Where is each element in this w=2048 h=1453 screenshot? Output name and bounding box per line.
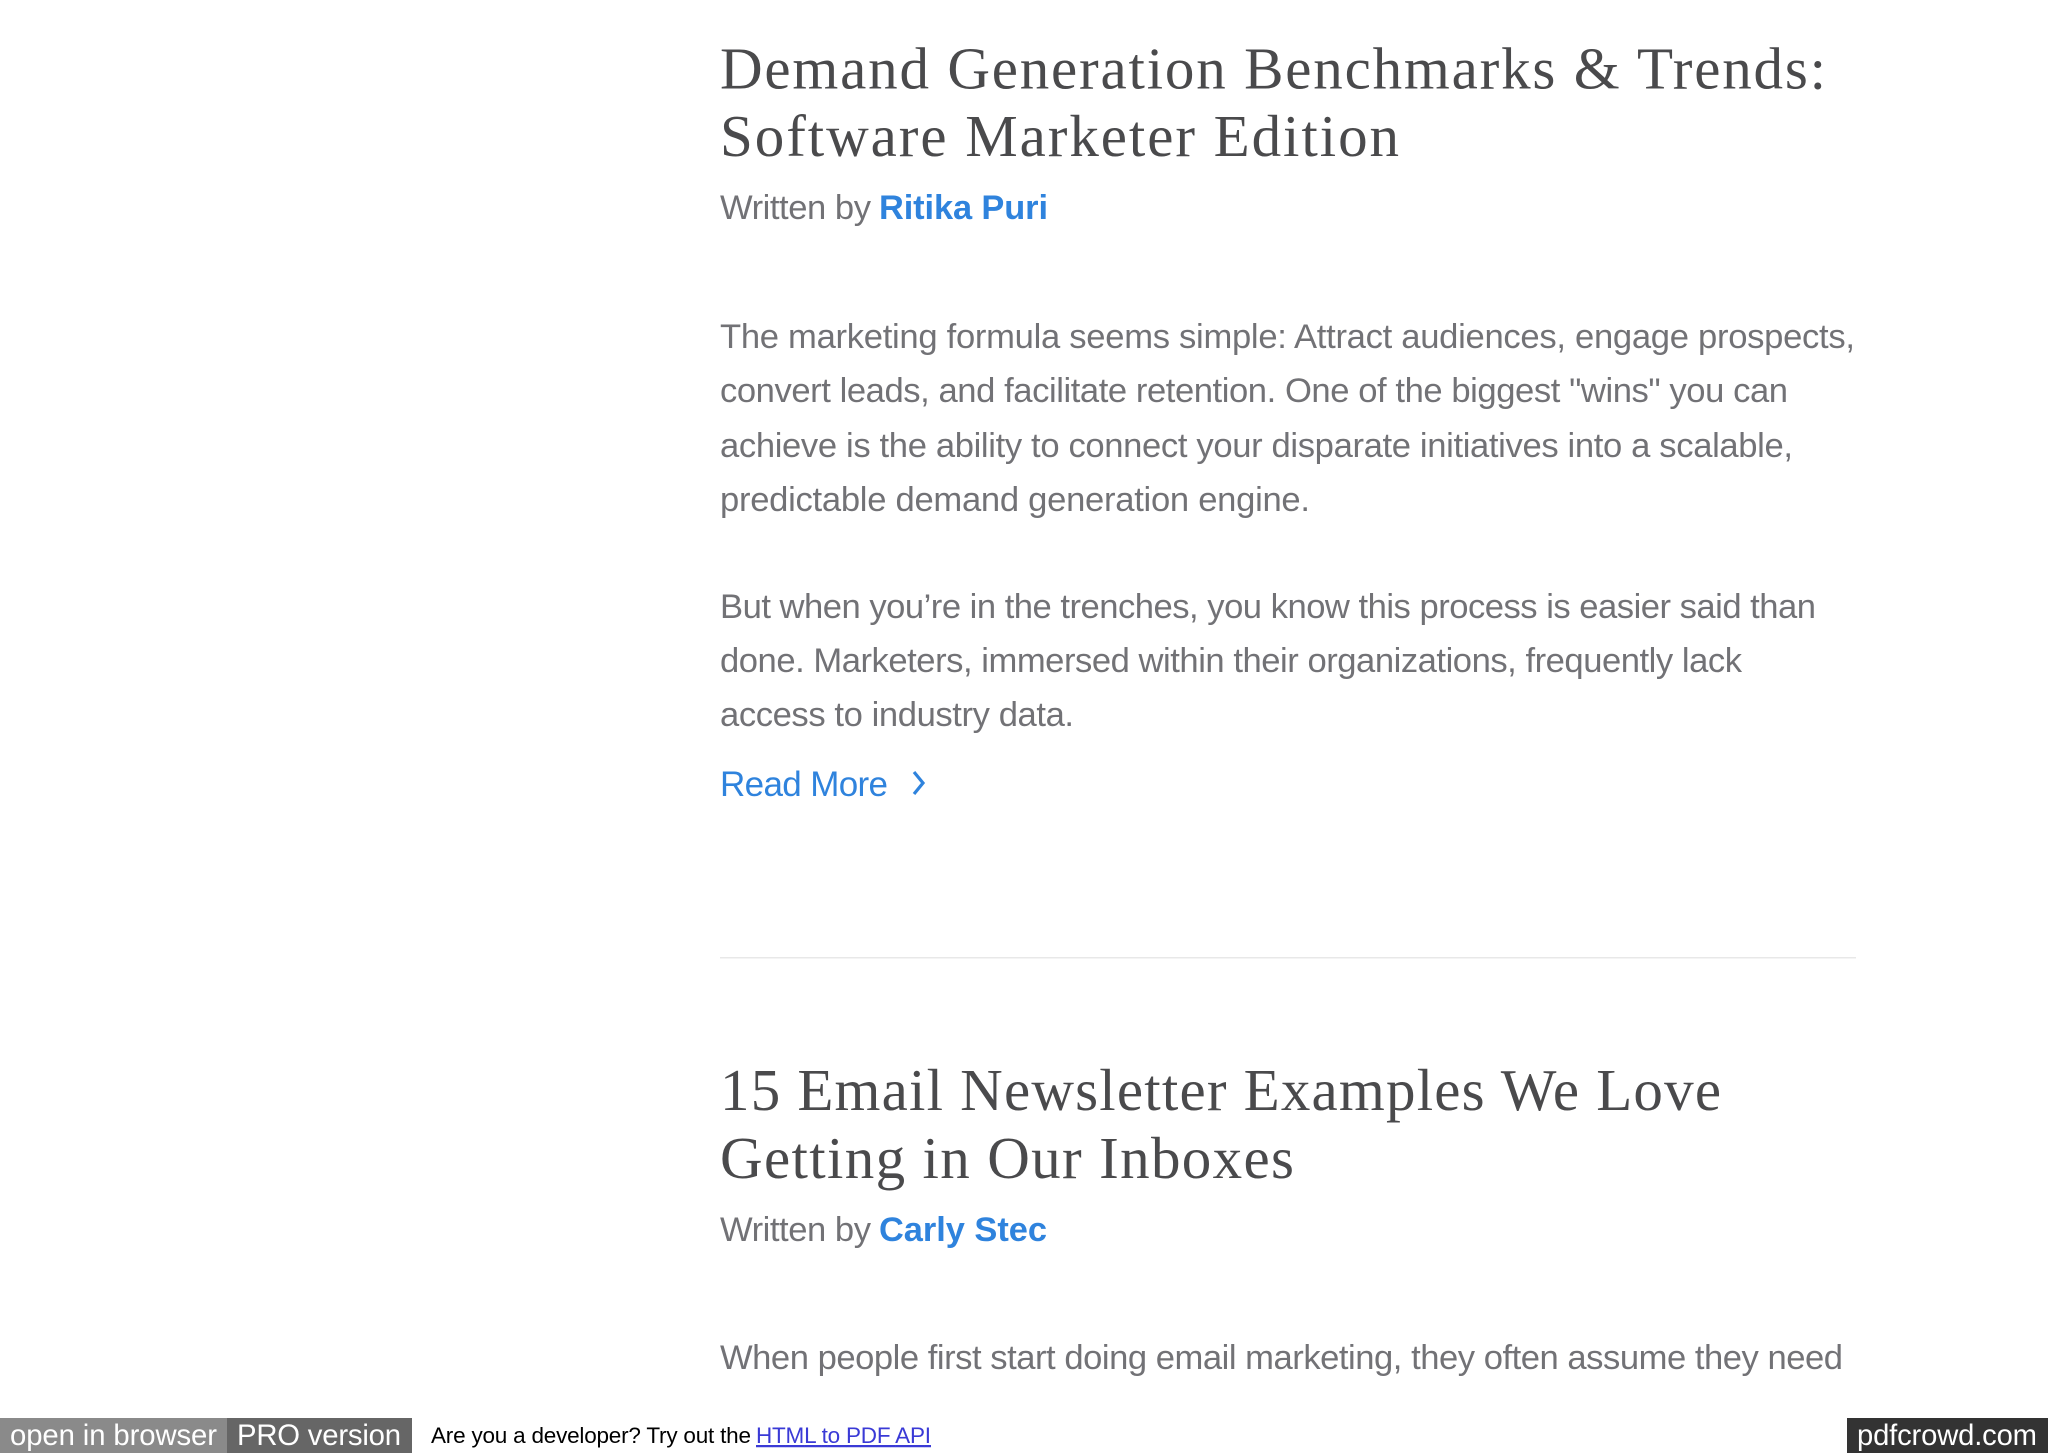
icon: chevron arrow: [914, 772, 923, 794]
read more link: Read More: [720, 765, 888, 804]
badge: pdfcrowd.com: pdfcrowd.com: [1857, 1420, 2037, 1452]
byline: article 2: Written by: [720, 1211, 872, 1249]
developer promo text: HTML to PDF API: [756, 1423, 931, 1448]
text block: paragraph 2: [720, 588, 1816, 734]
developer promo text: [431, 1423, 931, 1448]
title: article 1: Demand Generation Benchmarks & Trends:: [720, 36, 1826, 102]
title: article 2: [720, 1057, 1721, 1191]
byline: article 2: Carly Stec: [879, 1211, 1047, 1249]
title: article 1: Software Marketer Edition: [720, 103, 1399, 169]
article 1: [720, 36, 1855, 804]
footer bar: [0, 1418, 2048, 1453]
text block: paragraph 2: But when you’re in the trenches, you know this process is easier said than: [720, 588, 1816, 626]
developer promo text: Are you a developer? Try out the: [431, 1423, 751, 1448]
button: open in browser: open in browser: [10, 1419, 217, 1452]
text block: paragraph 1: The marketing formula seems simple: Attract audiences, engage prospects,: [720, 318, 1855, 356]
text block: paragraph 1: predictable demand generation engine.: [720, 481, 1310, 519]
text block: paragraph 1: convert leads, and facilitate retention. One of the biggest "wins" you can: [720, 372, 1788, 410]
article 2: [720, 1057, 1843, 1377]
button: PRO version: PRO version: [237, 1419, 401, 1452]
byline: article 2: [720, 1211, 1047, 1249]
text block: article 2 intro: When people first start doing email marketing, they often assume they need: [720, 1339, 1843, 1377]
byline: article 1: Written by: [720, 189, 872, 227]
text block: paragraph 2: done. Marketers, immersed within their organizations, frequently lack: [720, 642, 1743, 680]
text block: paragraph 1: [720, 318, 1855, 519]
title: article 2: Getting in Our Inboxes: [720, 1125, 1294, 1191]
byline: article 1: Ritika Puri: [879, 189, 1048, 227]
title: article 1: [720, 36, 1826, 169]
text block: paragraph 2: access to industry data.: [720, 696, 1074, 734]
title: article 2: 15 Email Newsletter Examples We Love: [720, 1057, 1721, 1123]
byline: article 1: [720, 189, 1048, 227]
text block: paragraph 1: achieve is the ability to connect your disparate initiatives into a scalable,: [720, 427, 1793, 465]
